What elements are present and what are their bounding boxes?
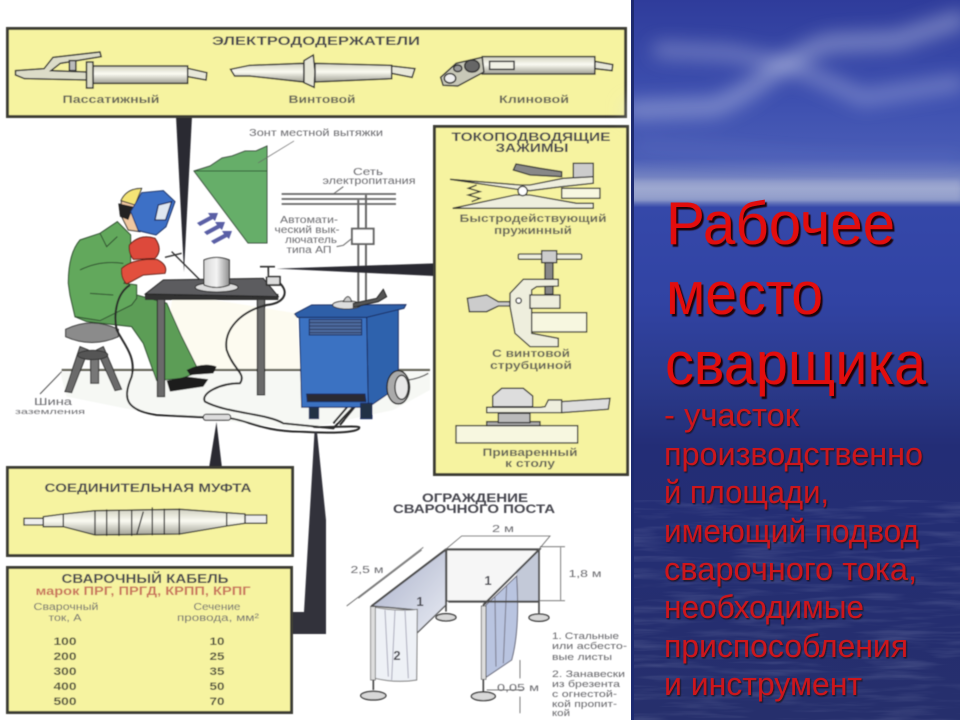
- left curtain: [375, 607, 417, 681]
- work piece: [195, 283, 238, 292]
- connector wedge: top panel to welder: [176, 116, 192, 272]
- trousers: [75, 295, 213, 381]
- dimension: 2 m: 2 м: [492, 524, 514, 535]
- cable coupling: [203, 414, 231, 420]
- title: welder's workplace: сварщика: [665, 330, 927, 397]
- text block: definition: и инструмент: [664, 666, 862, 702]
- back screen: [447, 550, 538, 601]
- heading: welding post fence line 2: СВАРОЧНОГО ПОСТА: [393, 502, 555, 516]
- scene: welder at the table: [40, 188, 435, 433]
- text block: definition: й площади,: [664, 474, 829, 510]
- title: welder's workplace: место: [666, 260, 823, 327]
- text block: definition: приспособления: [664, 628, 908, 664]
- label: breaker: типа АП: [286, 245, 332, 256]
- dimension: 0.05 m: 0,05 м: [497, 683, 539, 694]
- panel: sky and sea background: [631, 0, 960, 720]
- red sleeve upper: [129, 237, 159, 259]
- wall tint: [160, 293, 300, 370]
- text block: definition: имеющий подвод: [664, 513, 919, 549]
- icon: air flow arrows: [197, 213, 232, 244]
- icon: plier holder: [16, 52, 207, 88]
- label: mains: Сеть: [353, 167, 383, 178]
- text block: definition: - участок: [664, 397, 800, 433]
- title: welder's workplace: [665, 190, 927, 397]
- text block: definition: [664, 397, 923, 702]
- legend: fence notes: кой пропит-: [552, 699, 617, 710]
- panel: current clamps: [434, 126, 628, 474]
- welding machine: [295, 305, 406, 419]
- table values: section: 35: [210, 666, 224, 678]
- table column header: current: Сварочный: [34, 602, 98, 613]
- table top: [145, 278, 278, 297]
- table column header: section: [177, 602, 260, 624]
- panel: welding cable table: [8, 568, 292, 712]
- headband: [121, 188, 142, 205]
- table values: section: [210, 636, 224, 708]
- electrode: [165, 252, 200, 280]
- dimension lines: [347, 536, 565, 713]
- label: wedge holder: Клиновой: [499, 94, 569, 106]
- icon: screw holder: [231, 55, 415, 87]
- label: screw clamp: С винтовой: [492, 348, 570, 360]
- icon: spring clamp: [450, 163, 600, 208]
- legend: fence notes: или асбесто-: [552, 641, 627, 652]
- label: table-welded clamp line 2: к столу: [505, 458, 556, 470]
- label: local exhaust hood: Зонт местной вытяжки: [249, 128, 383, 139]
- heading: connecting sleeve: СОЕДИНИТЕЛЬНАЯ МУФТА: [44, 481, 252, 495]
- heading: current clamps: ТОКОПОДВОДЯЩИЕ: [452, 130, 610, 144]
- title: welder's workplace: Рабочее: [666, 190, 895, 257]
- legend: fence notes: вые листы: [552, 652, 612, 663]
- legend: fence notes: с огнестой-: [552, 689, 617, 700]
- background: white page: [0, 0, 632, 720]
- connector: cable table to cable: [292, 432, 326, 634]
- legend: fence notes: 2. Занавески: [552, 669, 625, 680]
- subheading: cable grades: марок ПРГ, ПРГД, КРПП, КРПГ: [36, 586, 251, 598]
- table values: section: 50: [210, 681, 224, 693]
- label: plier holder: Пассатижный: [62, 94, 160, 106]
- connector wedge right: [277, 263, 435, 276]
- label: breaker: лючатель: [285, 235, 337, 246]
- cables: [115, 283, 363, 433]
- ground bus leader: [40, 372, 62, 394]
- legend: fence notes: [552, 631, 627, 719]
- face: [120, 200, 140, 232]
- table column header: section: провода, мм²: [177, 613, 260, 624]
- heading: electrode holders: ЭЛЕКТРОДОДЕРЖАТЕЛИ: [212, 34, 420, 48]
- red sleeve lower: [122, 259, 166, 284]
- table column header: current: [34, 602, 98, 624]
- floor line: [62, 366, 430, 373]
- table values: current: 400: [54, 681, 76, 693]
- table values: current: [54, 636, 76, 708]
- right curtain: [486, 576, 518, 677]
- illustration column: [8, 28, 628, 719]
- heading: welding cable: СВАРОЧНЫЙ КАБЕЛЬ: [62, 571, 229, 586]
- text block: definition: необходимые: [664, 589, 864, 625]
- label: mains line 2: электропитания: [322, 176, 416, 187]
- clouds: [632, 20, 958, 161]
- table values: section: 10: [210, 636, 224, 648]
- panel: electrode holders: [8, 28, 626, 116]
- small clamp on table: [260, 267, 280, 285]
- feet: [361, 614, 549, 701]
- icon: table-welded clamp: [456, 388, 610, 443]
- fence number 1 right: 1: [484, 573, 492, 588]
- dimension: 2.5 m: 2,5 м: [350, 565, 384, 576]
- label: table-welded clamp: Приваренный: [482, 447, 578, 459]
- frame rails: [372, 549, 539, 606]
- table column header: current: ток, А: [48, 613, 82, 624]
- label: screw clamp line 2: струбциной: [490, 360, 572, 372]
- posts: [373, 550, 539, 692]
- floor shade: [60, 372, 430, 430]
- text block: definition: производственно: [664, 436, 923, 472]
- connector wedge: coupling panel: [209, 422, 222, 468]
- left screen: [372, 550, 446, 633]
- diagram: mains wiring with breaker: [282, 187, 396, 303]
- icon: local exhaust hood: [194, 141, 294, 243]
- right screen tint: [517, 550, 538, 601]
- fence number 2: 2: [393, 648, 401, 663]
- dimension: 1.8 m: 1,8 м: [568, 569, 602, 580]
- wheel: [387, 371, 410, 404]
- heading: welding post fence: ОГРАЖДЕНИЕ: [422, 491, 528, 505]
- label: breaker: ческий вык-: [274, 225, 340, 236]
- legend: fence notes: 1. Стальные: [552, 631, 619, 642]
- heading: current clamps line 2: ЗАЖИМЫ: [496, 141, 568, 155]
- icon: sleeve: [24, 507, 267, 536]
- tools on machine: [333, 301, 361, 309]
- legend: fence notes: из брезента: [552, 679, 621, 690]
- icon: screw clamp: [467, 251, 587, 347]
- table column header: section: Сечение: [194, 602, 241, 613]
- table values: current: 200: [54, 651, 76, 663]
- label: breaker: [274, 215, 340, 256]
- text block: definition: сварочного тока,: [664, 551, 917, 587]
- water ripples: [631, 500, 960, 720]
- label: ground bus line 2: заземления: [15, 407, 85, 416]
- table values: current: 100: [54, 636, 76, 648]
- table values: section: 25: [210, 651, 224, 663]
- table legs: [157, 298, 165, 397]
- jacket: [68, 222, 137, 321]
- panel: connecting sleeve: [8, 468, 292, 556]
- shoes: [167, 365, 217, 392]
- label: screw holder: Винтовой: [288, 94, 356, 106]
- fence number 1 left: 1: [416, 594, 424, 609]
- table values: current: 300: [54, 666, 76, 678]
- diagram: welding post fence: [347, 536, 565, 713]
- table values: section: 70: [210, 696, 224, 708]
- stool: [65, 323, 122, 393]
- icon: wedge holder: [441, 57, 613, 86]
- label: spring clamp: Быстродействующий: [460, 213, 606, 225]
- label: breaker: Автомати-: [280, 215, 338, 226]
- table values: current: 500: [54, 696, 76, 708]
- label: ground bus: Шина: [34, 397, 73, 408]
- label: spring clamp line 2: пружинный: [494, 225, 572, 237]
- horizon haze: [631, 180, 960, 200]
- mask: [131, 191, 175, 235]
- legend: fence notes: кой: [552, 708, 570, 719]
